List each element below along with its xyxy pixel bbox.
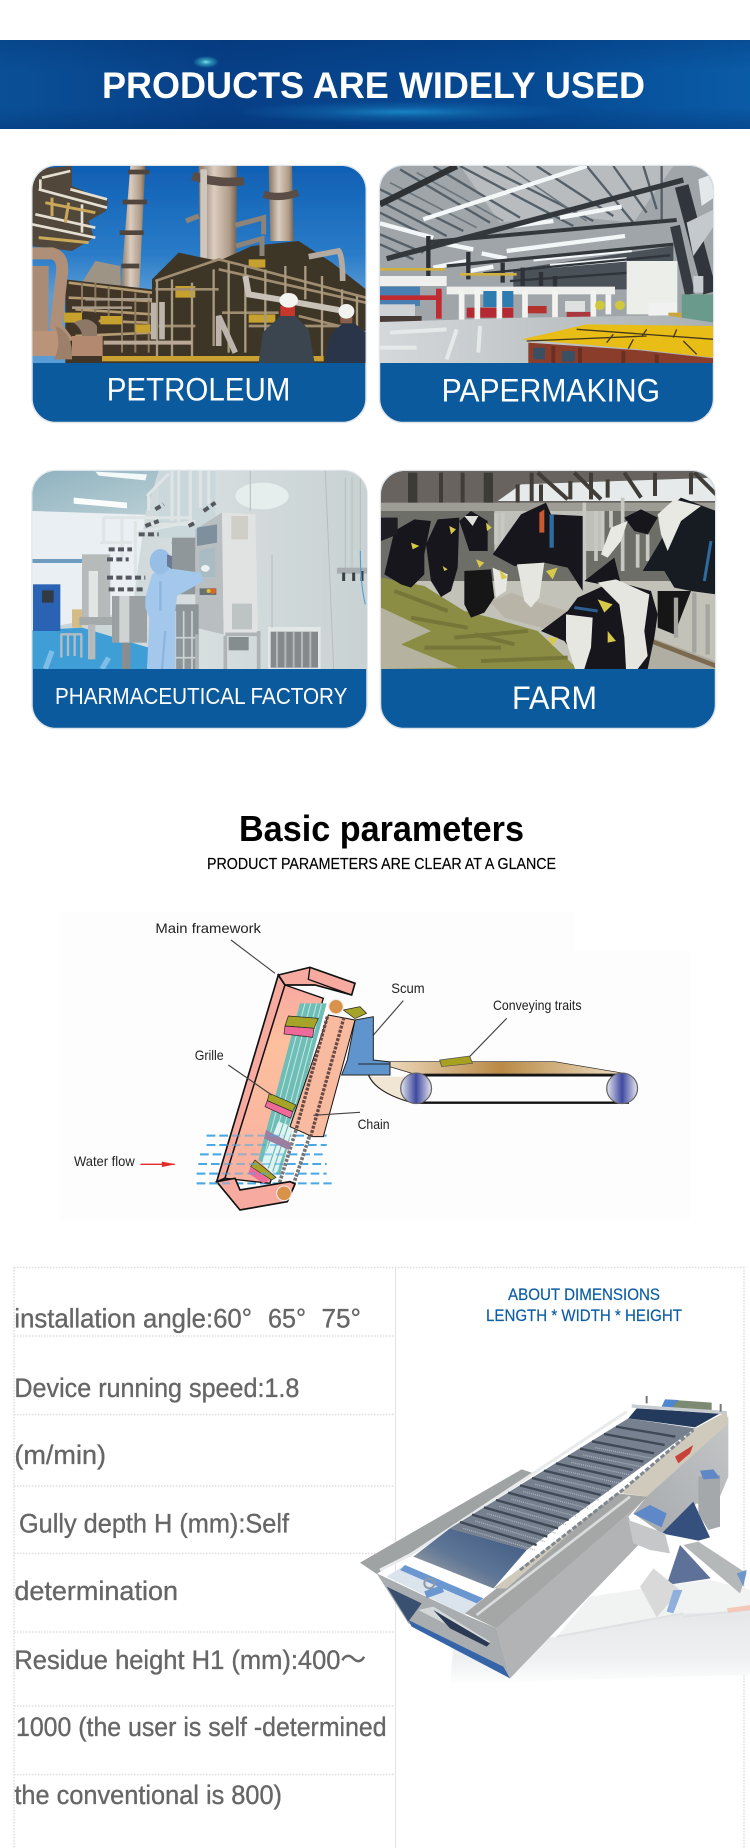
photo: factory hall [378,164,717,364]
heading: basic parameters: Basic parameters [239,808,524,849]
frame [217,975,285,1182]
top box [628,1408,720,1427]
reflection [450,1607,750,1685]
leaders [228,940,360,1115]
parameter table [14,1267,744,1848]
dimensions heading [486,1285,682,1325]
scraper blocks [285,1016,318,1028]
dimensions heading: LENGTH * WIDTH * HEIGHT [486,1306,682,1325]
front and trough [377,1573,510,1678]
panel: petroleum card [30,164,369,422]
label: petroleum: PETROLEUM [107,372,290,408]
dimensions heading: ABOUT DIMENSIONS [508,1285,660,1304]
inlet [413,1528,527,1588]
parameter text rows: Gully depth H (mm):Self [19,1509,289,1539]
parameter text rows: Residue height H1 (mm):400～ [14,1645,366,1675]
bottom tray [217,1178,295,1210]
diagram: grille machine [60,912,690,1220]
water lines [197,1136,332,1183]
subheading: PRODUCT PARAMETERS ARE CLEAR AT A GLANCE [207,856,556,873]
diagram labels: Conveying traits [493,997,582,1013]
diagram labels: Chain [358,1116,390,1132]
panel: papermaking card [378,164,717,422]
diagram labels [74,920,582,1169]
parameter text rows: installation angle:60° [14,1304,252,1334]
sprockets [329,999,343,1014]
conveyor belt [367,1056,638,1104]
product photo: bar screen machine [360,1396,750,1685]
photo: oil refinery [30,164,369,364]
parameter text rows: 1000 (the user is self -determined [16,1712,387,1742]
diagram labels: Main framework [155,920,262,936]
parameter text rows: 75° [322,1304,361,1334]
banner: products are widely used: PRODUCTS ARE WIDELY USED [102,65,645,106]
photo: dairy cows [379,469,718,671]
machine body [633,1417,728,1533]
banner: products are widely used [0,40,750,129]
diagram labels: Scum [391,980,425,996]
left wing [360,1469,534,1574]
parameter text rows: determination [14,1576,178,1606]
diagram labels: Water flow [74,1153,136,1169]
grille frame [197,940,390,1210]
scum chute [342,1017,390,1075]
photo: clean room [30,469,369,671]
parameter text rows: (m/min) [14,1440,106,1470]
label: pharmaceutical factory: PHARMACEUTICAL FACTORY [55,683,347,709]
panel: pharmaceutical factory card [30,469,369,728]
diagram labels: Grille [195,1047,224,1063]
heading: basic parameters [207,808,556,873]
parameter text rows: Device running speed:1.8 [14,1373,299,1403]
label: farm: FARM [512,680,597,716]
leader lines and arrow [369,1001,507,1057]
water over frame [197,1136,283,1183]
parameter text rows: 65° [268,1304,306,1334]
parameter text rows: the conventional is 800) [14,1780,282,1810]
panel: farm card [379,469,718,728]
label: papermaking: PAPERMAKING [442,373,660,409]
parameter text rows [14,1304,387,1810]
grate [450,1418,695,1550]
right rim [465,1493,647,1628]
